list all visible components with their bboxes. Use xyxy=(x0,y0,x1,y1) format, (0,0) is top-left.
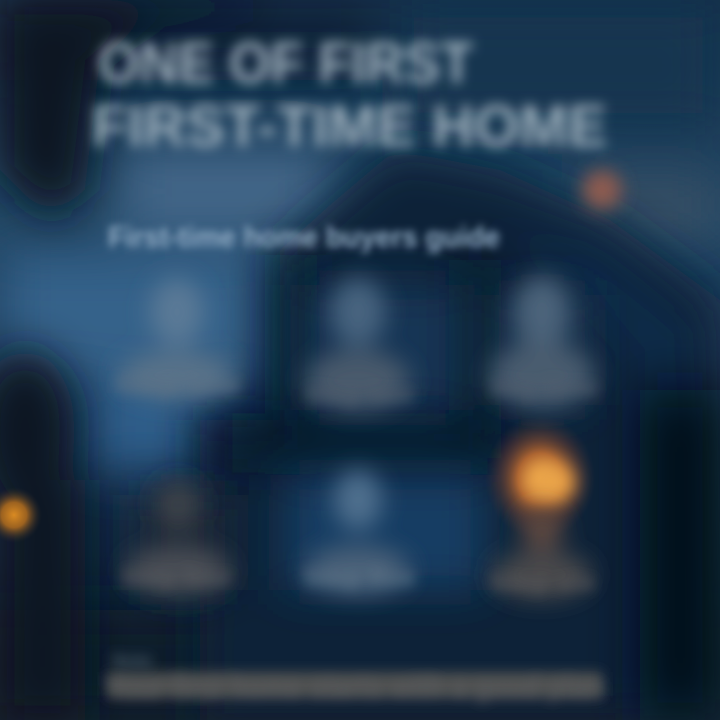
item 5: person icon and label: Step five xyxy=(303,565,415,590)
item 2: person icon and label xyxy=(305,278,413,410)
footer text: Note xyxy=(112,651,152,671)
footer text xyxy=(105,651,603,702)
house silhouette xyxy=(200,150,720,720)
item 1: person icon and label: Step one xyxy=(115,372,240,397)
item 3: person icon and label: Step three xyxy=(490,375,598,400)
footer text: Your first home starts with a good plan xyxy=(105,671,603,702)
subtitle: First-time home buyers guide xyxy=(108,221,500,254)
title line 1: ONE OF FIRST xyxy=(98,31,473,96)
item 6: person icon and label xyxy=(490,510,596,599)
item 2: person icon and label: Step two xyxy=(305,382,413,407)
porch lamp glow xyxy=(485,416,595,540)
item 1: person icon and label xyxy=(115,278,240,399)
item 6: person icon and label: Step six xyxy=(490,570,596,595)
title xyxy=(92,31,607,159)
house windows xyxy=(140,285,585,590)
dark trees xyxy=(0,0,260,720)
item 5: person icon and label xyxy=(303,470,415,594)
item 3: person icon and label xyxy=(490,276,598,407)
left lamp glow xyxy=(0,487,42,543)
sunset spot xyxy=(582,170,622,210)
item 4: person icon and label xyxy=(122,481,232,594)
title line 2: FIRST-TIME HOME xyxy=(92,94,607,159)
item 4: person icon and label: Step four xyxy=(122,565,232,590)
